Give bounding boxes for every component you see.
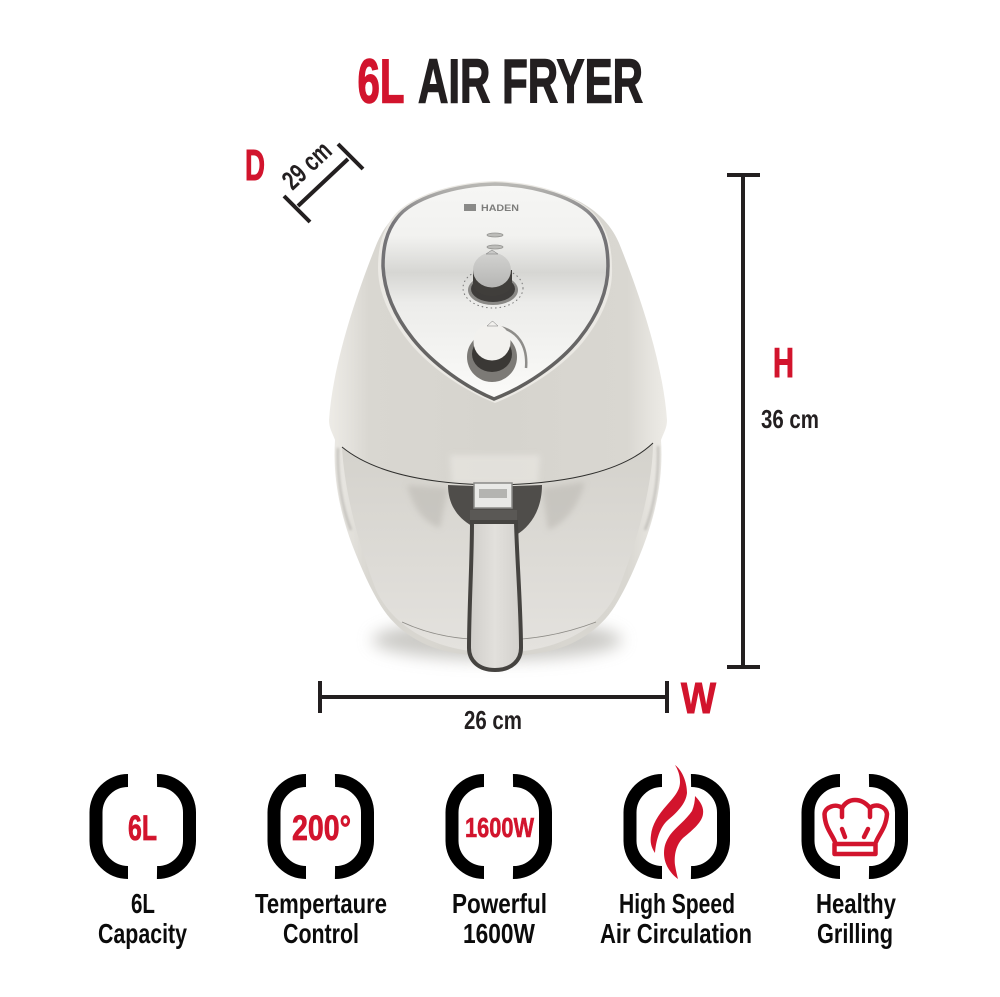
handle clip — [470, 483, 517, 522]
feature: air circulation — [600, 765, 752, 949]
label: 6L — [131, 888, 155, 919]
handle mount — [448, 485, 542, 535]
label — [98, 888, 187, 949]
width measure line — [320, 681, 667, 713]
body highlight above handle — [450, 455, 540, 484]
width letter: W — [681, 674, 716, 723]
feature: power — [452, 780, 547, 949]
label: Capacity — [98, 918, 187, 949]
brand logo: HADEN — [481, 203, 519, 214]
label — [816, 888, 896, 949]
indicator lights — [487, 233, 503, 249]
width value: 26 cm — [464, 705, 522, 735]
icon: bracket with 200 degrees: 200° — [292, 809, 351, 848]
basket reflection left — [407, 485, 448, 528]
feature: capacity — [96, 780, 190, 949]
air fryer product — [329, 181, 667, 670]
icon: bracket with flame — [630, 765, 724, 879]
feature: temperature — [255, 780, 387, 949]
fryer upper body — [329, 183, 667, 656]
basket edge shading right — [645, 446, 658, 530]
depth dimension — [245, 135, 363, 222]
label: Control — [283, 918, 359, 949]
title — [358, 48, 643, 116]
label — [255, 888, 387, 949]
handle — [469, 522, 521, 670]
icon: bracket with 6L: 6L — [128, 809, 157, 848]
base seam — [402, 622, 596, 639]
title: AIR FRYER — [418, 48, 643, 116]
basket edge shading left — [338, 448, 351, 530]
label: Air Circulation — [600, 918, 752, 949]
label: 1600W — [463, 918, 535, 949]
label: Tempertaure — [255, 888, 387, 919]
width dimension — [320, 674, 716, 735]
basket reflection right — [542, 482, 585, 530]
floor shadow — [372, 620, 622, 660]
top panel — [383, 184, 608, 399]
fryer basket lower body — [342, 443, 653, 653]
depth measure line — [284, 144, 363, 222]
label — [600, 888, 752, 949]
label: High Speed — [619, 888, 735, 919]
label — [452, 888, 547, 949]
icon: bracket with 1600W — [452, 780, 546, 873]
height value: 36 cm — [761, 404, 819, 434]
brand logo — [464, 203, 519, 214]
icon: bracket with 6L — [96, 780, 190, 873]
height measure line — [727, 175, 760, 667]
height dimension — [727, 175, 819, 667]
label: Grilling — [817, 918, 893, 949]
height letter: H — [773, 339, 794, 386]
depth value: 29 cm — [276, 135, 338, 195]
timer knob — [463, 250, 523, 308]
feature: healthy grilling — [808, 780, 902, 949]
icon: bracket with chef hat — [808, 780, 902, 873]
seam line — [342, 443, 653, 485]
panel light rim — [378, 181, 612, 403]
label: Healthy — [816, 888, 896, 919]
temperature knob — [467, 321, 526, 382]
title: 6L — [358, 48, 404, 116]
icon: bracket with 200 degrees — [274, 780, 368, 873]
label: Powerful — [452, 888, 547, 919]
depth letter: D — [245, 141, 265, 190]
icon: bracket with 1600W: 1600W — [465, 812, 534, 843]
